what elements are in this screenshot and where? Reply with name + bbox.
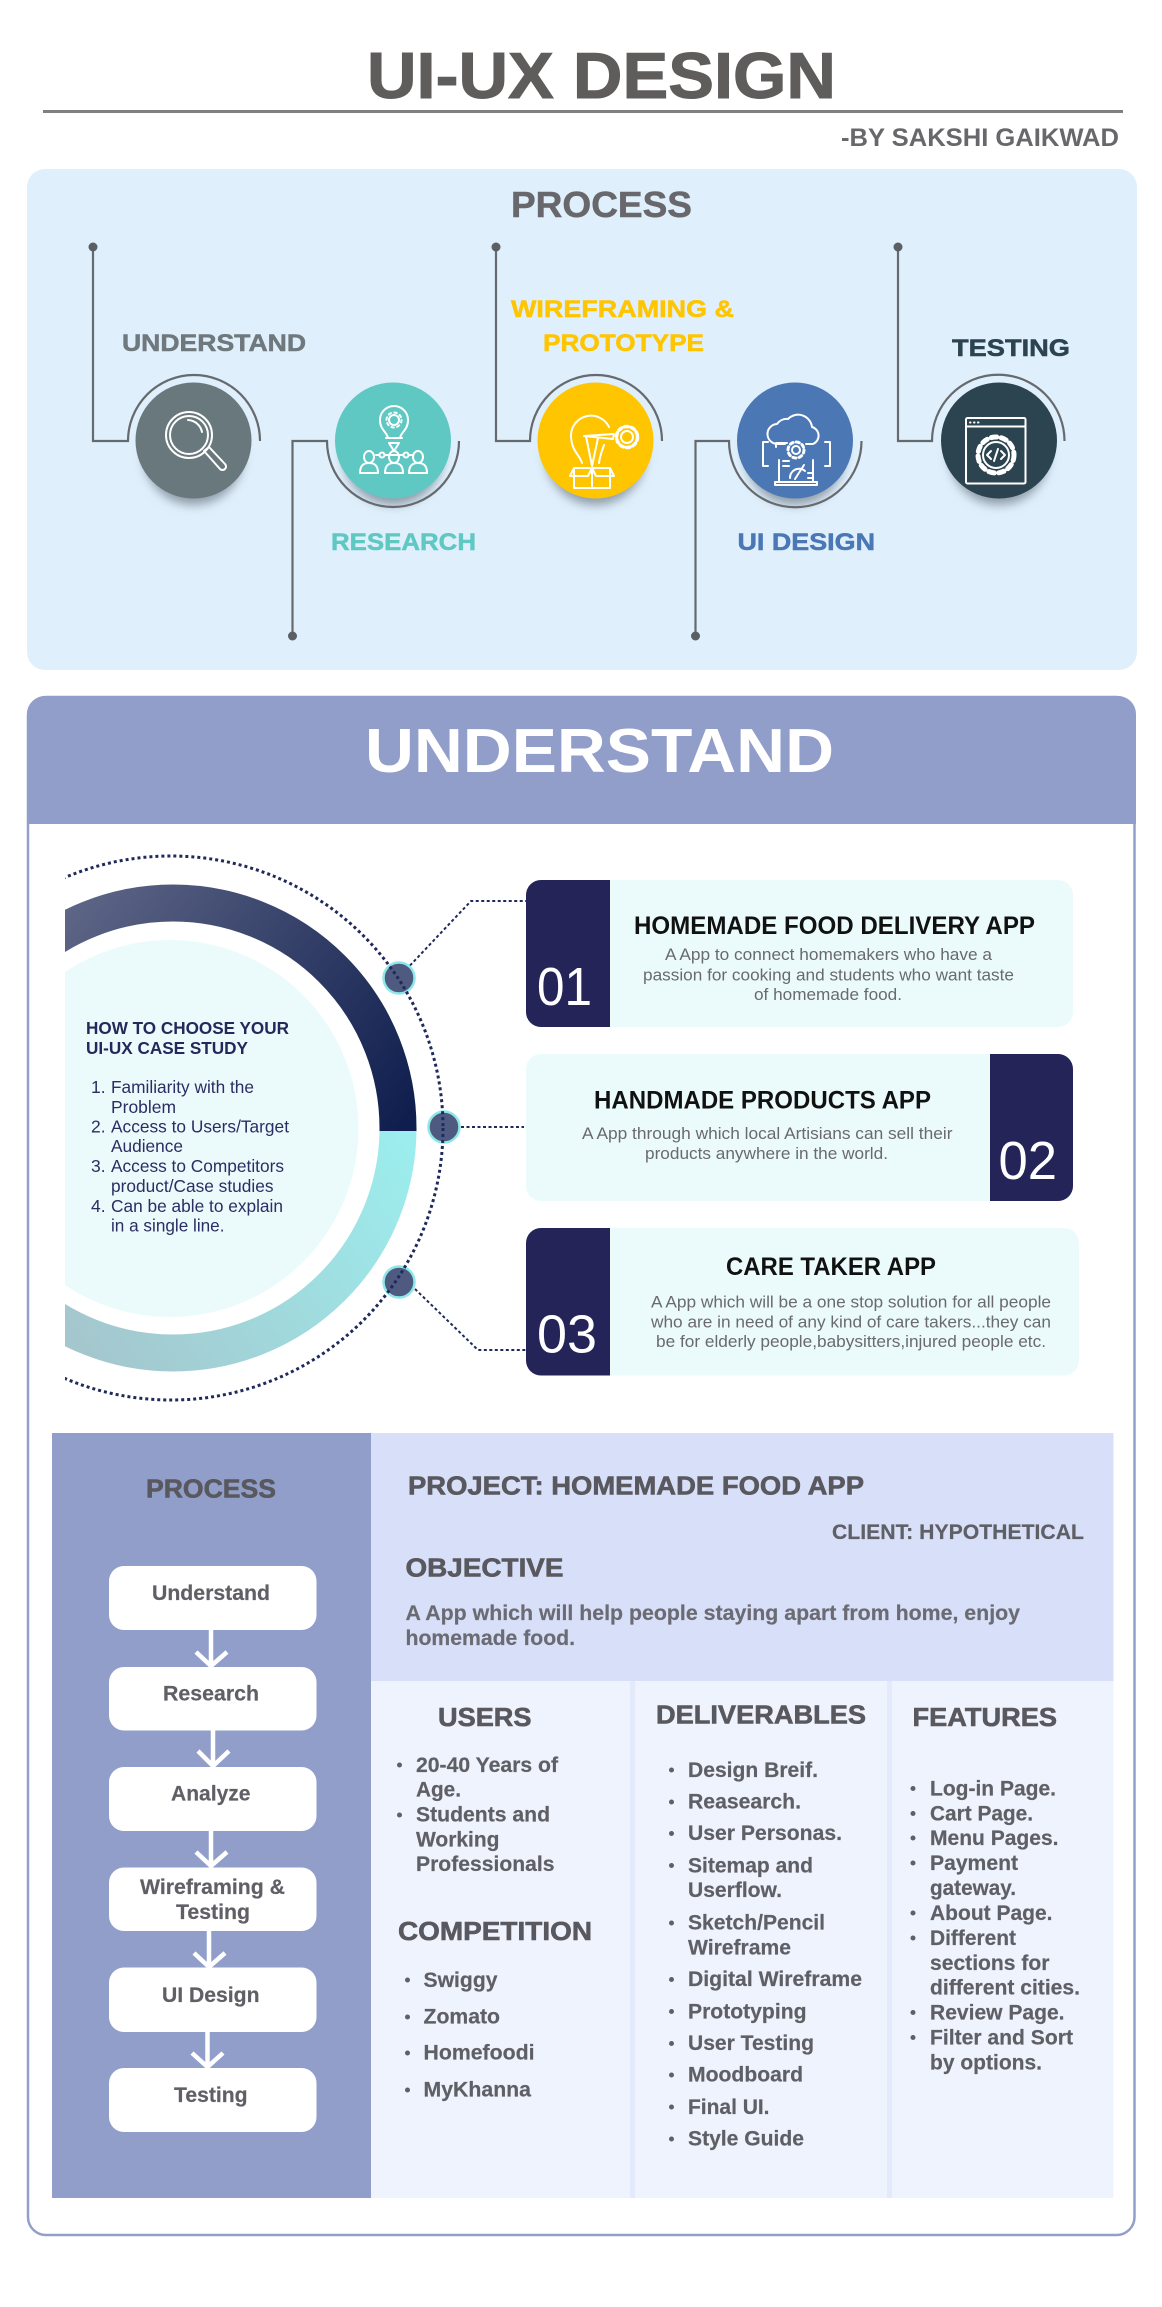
column: users and competition: 20-40 Years of	[416, 1754, 559, 1777]
icon: cloud and laptop	[763, 415, 830, 485]
column: deliverables: Sketch/Pencil	[688, 1912, 825, 1934]
flow box: wireframing and testing: Wireframing &	[140, 1876, 285, 1899]
inner circle text area: product/Case studies	[111, 1176, 274, 1196]
inner circle text area: Familiarity with the	[111, 1077, 254, 1097]
column: users and competition	[397, 1702, 592, 2102]
icon: magnifier	[166, 412, 226, 470]
column: deliverables: Digital Wireframe	[688, 1968, 862, 1991]
column: features: Different	[930, 1927, 1016, 1950]
flow box: testing: Testing	[174, 2084, 248, 2107]
flow box: wireframing and testing	[109, 1868, 316, 1931]
card 02: A App through which local Artisians can sell their	[582, 1124, 953, 1143]
flow box: understand	[109, 1566, 316, 1630]
title: UI-UX DESIGN	[367, 39, 836, 112]
column: deliverables: Final UI.	[688, 2096, 770, 2119]
flow box: ui design: UI Design	[162, 1984, 260, 2007]
ring: dark half	[65, 884, 416, 1131]
project summary: OBJECTIVE	[406, 1552, 564, 1582]
inner circle text area: 1.	[91, 1077, 106, 1097]
project summary: homemade food.	[406, 1627, 575, 1650]
inner circle text area: 2.	[91, 1116, 106, 1136]
inner circle text area: HOW TO CHOOSE YOUR	[86, 1018, 289, 1038]
label: understand: UNDERSTAND	[122, 330, 306, 357]
card 02	[526, 1054, 1073, 1201]
column: users and competition: Homefoodi	[424, 2042, 534, 2064]
ring: light half	[65, 1131, 416, 1372]
flow box: testing	[109, 2068, 316, 2132]
card 03: A App which will be a one stop solution for all people	[651, 1292, 1051, 1312]
inner circle text area: Access to Competitors	[111, 1156, 284, 1176]
column: deliverables: User Personas.	[688, 1822, 842, 1845]
label: wireframing and prototype: WIREFRAMING &	[511, 296, 734, 323]
step: testing	[894, 242, 1070, 505]
panel: process	[27, 169, 1137, 670]
column: features: sections for	[930, 1952, 1050, 1975]
label: wireframing and prototype: PROTOTYPE	[543, 330, 704, 357]
card 02: products anywhere in the world.	[645, 1144, 888, 1163]
column: users and competition: Working	[416, 1828, 500, 1852]
column: deliverables: Design Breif.	[688, 1759, 818, 1782]
column: features: Log-in Page.	[930, 1778, 1056, 1800]
column: features: gateway.	[930, 1877, 1016, 1900]
card 01: HOMEMADE FOOD DELIVERY APP	[634, 912, 1035, 940]
inner circle text area: 3.	[91, 1156, 106, 1176]
column: features: Menu Pages.	[930, 1827, 1058, 1850]
step: understand	[88, 242, 306, 505]
card 01	[526, 880, 1073, 1027]
icon: bulb and people	[360, 406, 427, 473]
icon: bulb, gear and box	[570, 416, 638, 488]
dotted outer ring	[65, 854, 444, 1402]
flow box: ui design	[109, 1968, 316, 2032]
card 03: be for elderly people,babysitters,injured people etc.	[656, 1332, 1046, 1351]
heading: process: PROCESS	[511, 184, 692, 225]
sidebar heading: PROCESS	[146, 1474, 276, 1504]
sidebar: process flow	[52, 1433, 371, 2198]
step: ui design	[691, 382, 875, 640]
flow box: analyze	[109, 1767, 316, 1831]
card 01: of homemade food.	[754, 985, 902, 1004]
column: users and competition: COMPETITION	[398, 1916, 592, 1946]
column: deliverables: Reasearch.	[688, 1790, 801, 1814]
column: deliverables: Wireframe	[688, 1936, 791, 1960]
column: features: About Page.	[930, 1902, 1052, 1925]
icon: code window	[966, 418, 1026, 484]
inner circle text area: Access to Users/Target	[111, 1116, 289, 1136]
inner circle text area: 4.	[91, 1196, 106, 1216]
column: features	[910, 1702, 1080, 2074]
label: wireframing and prototype	[511, 296, 734, 357]
step: wireframing and prototype	[492, 242, 734, 505]
project summary: A App which will help people staying apart from home, enjoy	[406, 1602, 1020, 1625]
card 03	[526, 1228, 1079, 1376]
flow box: analyze: Analyze	[171, 1782, 250, 1806]
column: deliverables: Sitemap and	[688, 1854, 813, 1878]
inner circle text area	[65, 940, 358, 1317]
inner circle text area: UI-UX CASE STUDY	[86, 1038, 248, 1058]
header band	[27, 696, 1136, 824]
flow arrows	[192, 1630, 229, 2067]
flow box: research	[109, 1667, 316, 1730]
column: features: different cities.	[930, 1976, 1080, 2000]
card 02: HANDMADE PRODUCTS APP	[594, 1086, 931, 1114]
column: features: FEATURES	[912, 1702, 1057, 1732]
column: deliverables: Style Guide	[688, 2128, 804, 2150]
column: deliverables: User Testing	[688, 2032, 814, 2055]
flow box: research: Research	[163, 1682, 259, 1706]
inner circle text area: Audience	[111, 1136, 183, 1156]
project summary: PROJECT: HOMEMADE FOOD APP	[408, 1470, 864, 1500]
column: features: Review Page.	[930, 2002, 1064, 2024]
column: users and competition: Zomato	[424, 2006, 500, 2028]
column dividers	[630, 1681, 892, 2198]
inner circle text area: Problem	[111, 1097, 176, 1117]
card 01: passion for cooking and students who want taste	[643, 966, 1014, 984]
inner circle text area: Can be able to explain	[111, 1196, 283, 1216]
panel: understand	[0, 696, 1136, 2235]
label: research: RESEARCH	[331, 529, 476, 556]
inner circle text area: in a single line.	[111, 1216, 224, 1236]
flow box: understand: Understand	[152, 1582, 270, 1605]
label: testing: TESTING	[952, 335, 1070, 362]
nodes	[384, 962, 460, 1298]
column: features: Filter and Sort	[930, 2026, 1073, 2050]
column: users and competition: Professionals	[416, 1853, 554, 1876]
column: deliverables: Prototyping	[688, 2000, 806, 2024]
column: deliverables: Moodboard	[688, 2064, 803, 2086]
column: users and competition: Swiggy	[424, 1969, 498, 1992]
step: research	[288, 382, 476, 640]
connectors	[410, 901, 526, 1350]
card 01: 01	[537, 957, 592, 1017]
column: features: by options.	[930, 2052, 1042, 2074]
column: users and competition: MyKhanna	[424, 2078, 531, 2102]
card 03: who are in need of any kind of care takers...they can	[650, 1312, 1051, 1332]
title rule	[43, 110, 1123, 113]
card 01: A App to connect homemakers who have a	[665, 945, 993, 964]
heading: understand: UNDERSTAND	[365, 717, 834, 786]
column: users and competition: Students and	[416, 1804, 550, 1826]
byline: -BY SAKSHI GAIKWAD	[841, 124, 1119, 152]
column: features: Cart Page.	[930, 1802, 1033, 1826]
label: ui design: UI DESIGN	[738, 529, 875, 556]
column: features: Payment	[930, 1852, 1018, 1875]
column: users and competition: USERS	[438, 1702, 532, 1732]
project summary	[371, 1433, 1114, 1681]
circular diagram	[65, 854, 526, 1402]
column: users and competition: Age.	[416, 1778, 461, 1802]
project summary: CLIENT: HYPOTHETICAL	[832, 1521, 1084, 1544]
card 03: 03	[537, 1304, 597, 1364]
column: deliverables	[656, 1700, 866, 2150]
card 02: 02	[998, 1131, 1057, 1191]
column: deliverables: Userflow.	[688, 1879, 782, 1902]
card 03: CARE TAKER APP	[726, 1253, 936, 1281]
flow box: wireframing and testing: Testing	[176, 1901, 250, 1924]
columns background	[371, 1681, 1114, 2198]
column: deliverables: DELIVERABLES	[656, 1700, 866, 1730]
